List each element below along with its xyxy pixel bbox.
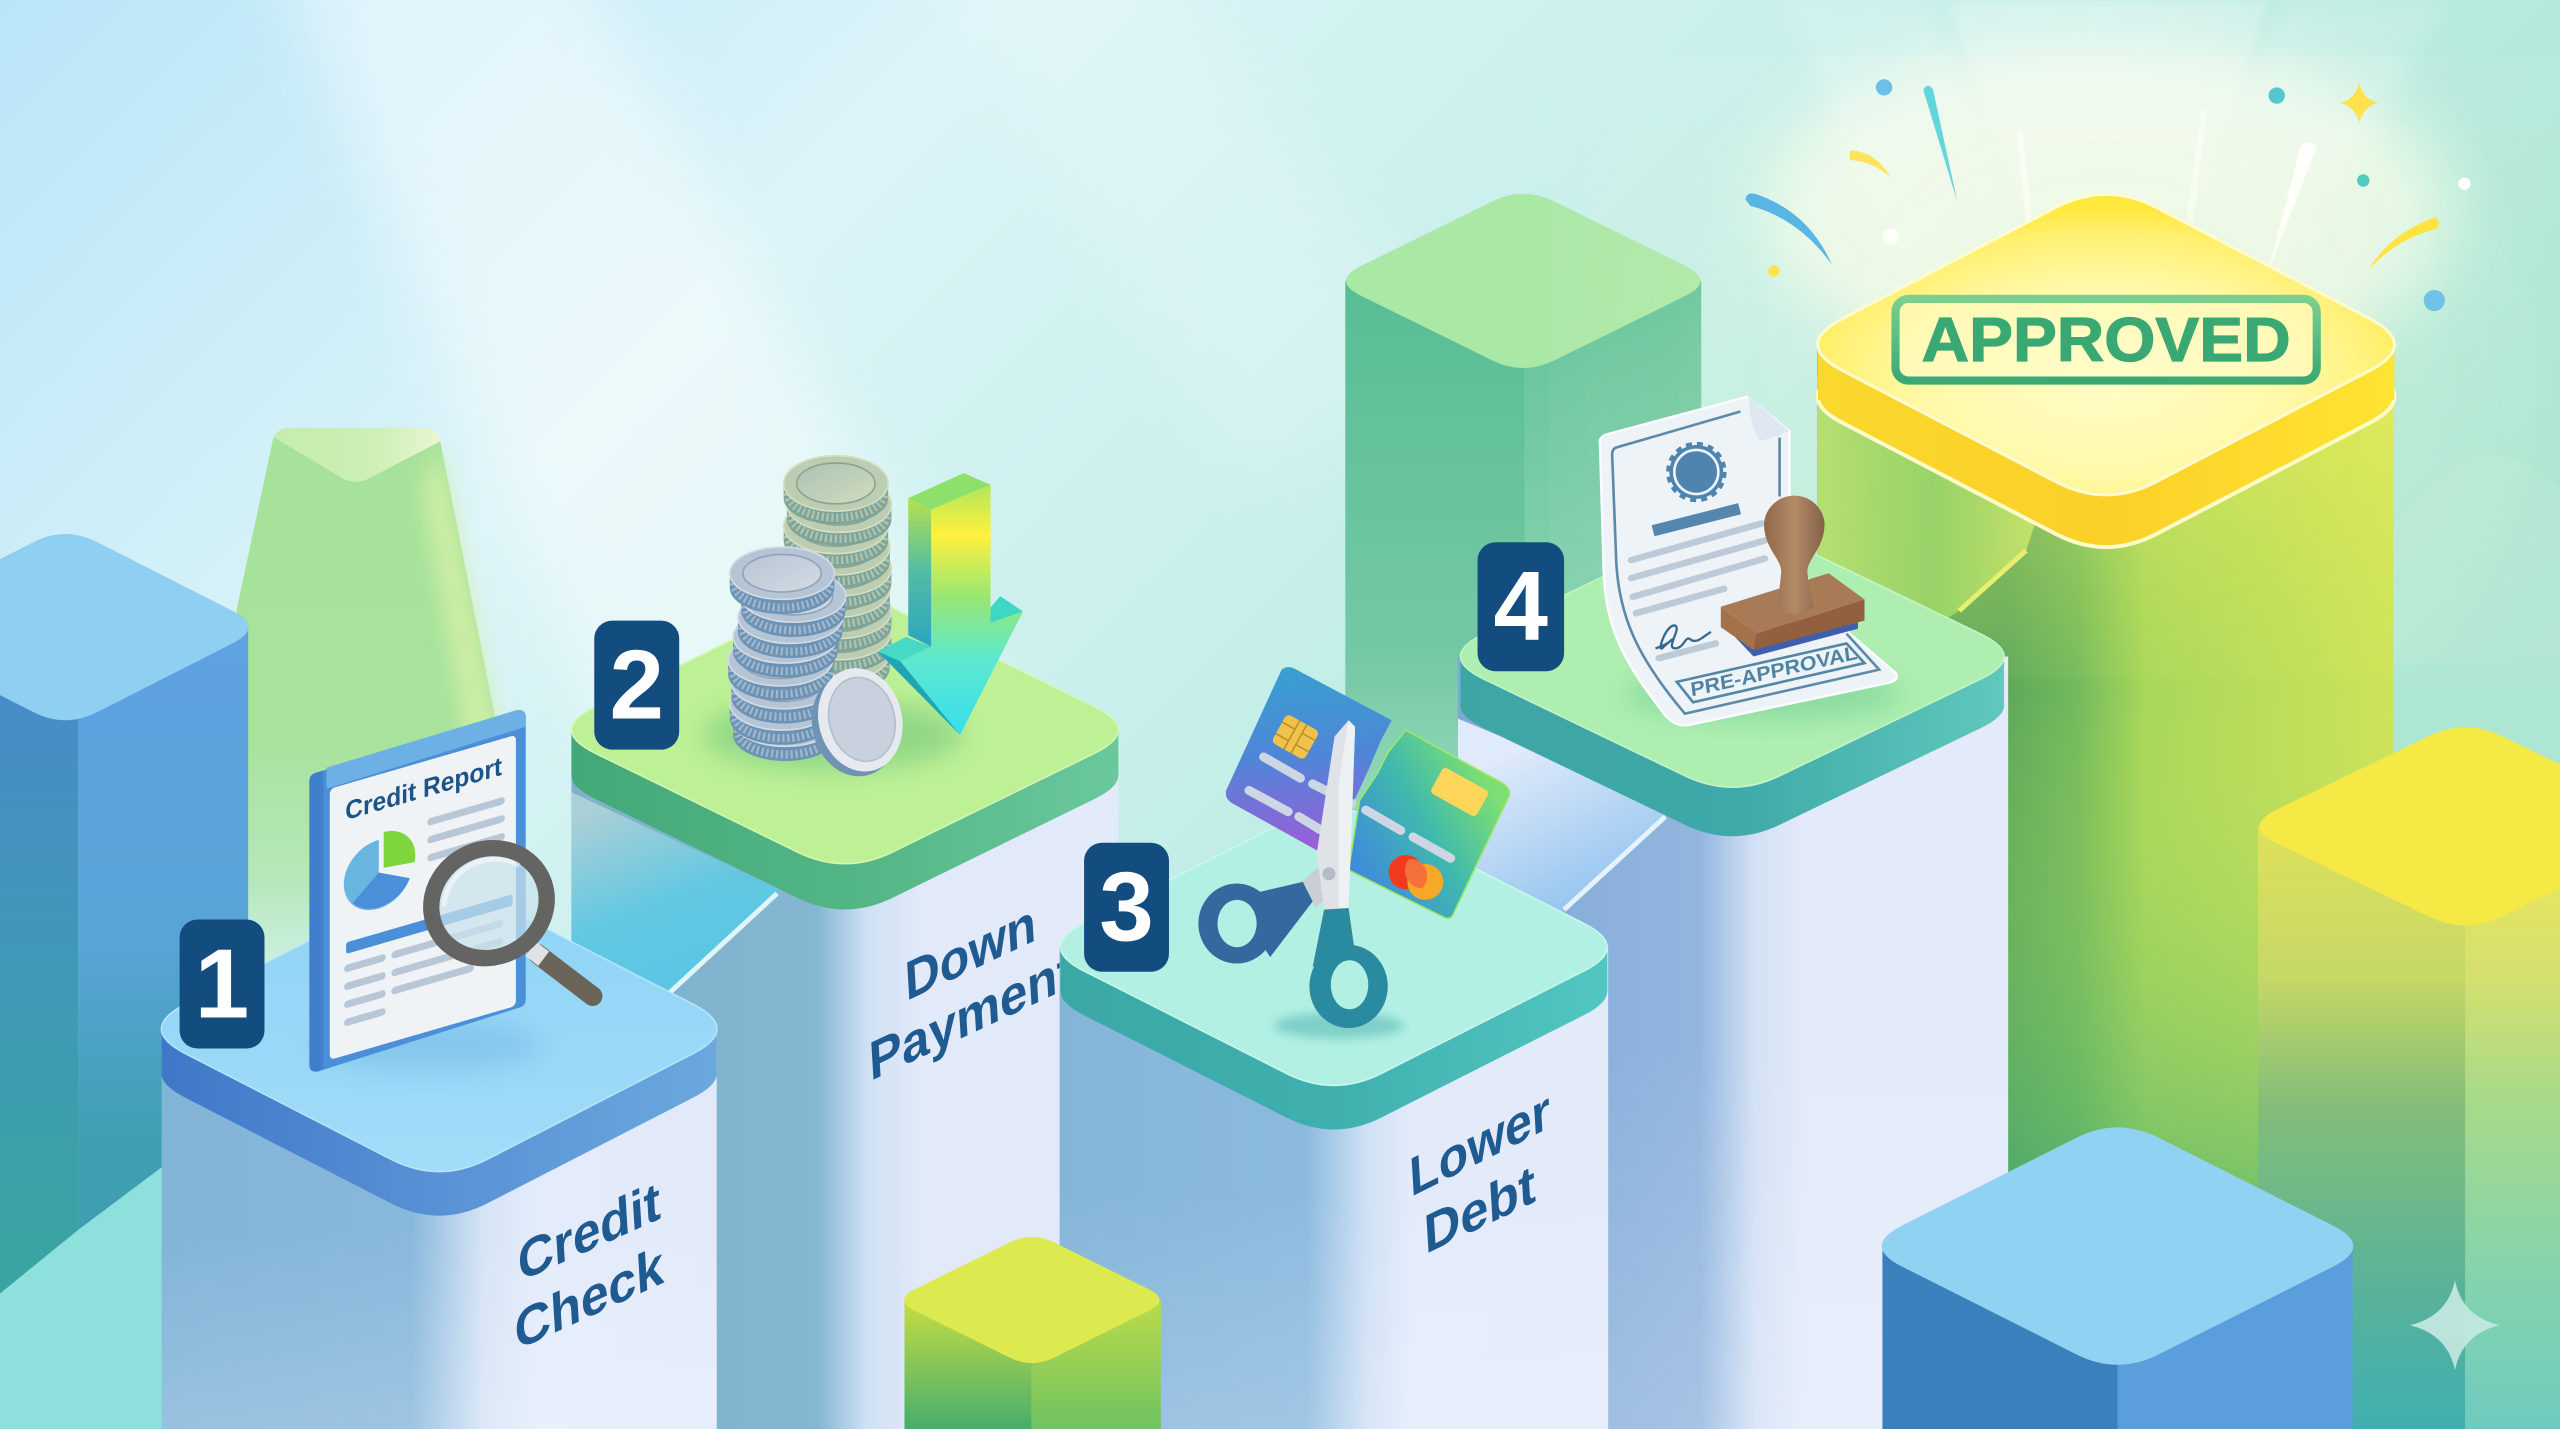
scissors (1198, 720, 1388, 1028)
rubber stamp (1721, 496, 1864, 657)
pillar 1 top (161, 886, 717, 1172)
pillar 2 rim (571, 642, 1118, 909)
pillar 3 top (1061, 809, 1607, 1085)
approved stamp: APPROVED (1922, 306, 2291, 375)
icon: cut credit card and scissors (1198, 667, 1510, 1039)
approved platform rim (1818, 247, 2395, 547)
pillar 4: pre-approval (1458, 526, 2008, 1429)
signature (1656, 625, 1711, 649)
report frame (309, 710, 526, 1072)
down arrow (878, 473, 1023, 735)
approved under-rim glow (1818, 248, 2395, 555)
bottom blue block (1882, 1127, 2353, 1429)
pillar 3: lower debt (1060, 809, 1608, 1429)
bottom green block (904, 1237, 1161, 1429)
badge 3 (1084, 843, 1169, 972)
pillar 1 label: Credit (516, 1169, 662, 1293)
back ghost green block (237, 428, 509, 996)
approved stamp (1896, 299, 2317, 381)
pillar 3 label (1408, 1079, 1552, 1267)
badge 4: 4 (1494, 551, 1548, 661)
seal (1669, 445, 1723, 499)
badge 3: 3 (1099, 852, 1154, 962)
pie chart (344, 823, 415, 919)
card left half (1226, 667, 1392, 850)
background hill (2393, 454, 2560, 817)
badge 2: 2 (609, 630, 664, 740)
pillar 1 rim (161, 930, 717, 1216)
icon: pre-approval document and stamp (1600, 397, 1902, 725)
icon: credit report and magnifier (309, 710, 593, 1072)
pillar 1 label: Check (513, 1235, 666, 1363)
pillar 3 label: Lower (1408, 1079, 1552, 1209)
document (1600, 397, 1897, 725)
back green block (1345, 194, 1701, 967)
pillar 3 label: Debt (1422, 1153, 1537, 1267)
pillar 3 rim (1060, 853, 1607, 1130)
pillar: approved (1817, 194, 2395, 1429)
approved glow and rays (1763, 0, 2449, 528)
badge 1: 1 (195, 928, 249, 1038)
right yellow block (2258, 727, 2560, 1429)
pillar 4 rim (1460, 575, 2004, 836)
pillar 1 label (513, 1169, 666, 1363)
leaning coin (800, 659, 914, 786)
bottom-right sparkle (2410, 1280, 2500, 1370)
front coin stack (728, 547, 846, 761)
back blue block (0, 534, 249, 1293)
pillar 2: down payment (571, 596, 1118, 1429)
pillar 2 top (572, 596, 1118, 864)
pre-approval text box: PRE-APPROVAL (1689, 642, 1859, 701)
blue handle (1198, 882, 1313, 964)
pillar 4 top (1460, 526, 2004, 787)
badge 4 (1478, 542, 1564, 671)
magnifier (412, 828, 593, 996)
pillar 2 label: Payment (867, 938, 1075, 1093)
report title: Credit Report (345, 751, 502, 826)
background light rays (269, 0, 1469, 980)
approved platform top (1818, 194, 2395, 495)
badge 1 (180, 919, 264, 1048)
badge 2 (594, 621, 679, 750)
pillar 1: credit check (161, 886, 717, 1429)
back coin stack (784, 456, 891, 694)
confetti (1745, 79, 2471, 311)
pillar 2 label: Down (903, 892, 1037, 1013)
teal handle (1309, 908, 1388, 1028)
icon: coins and down arrow (702, 456, 1023, 786)
card right half (1349, 730, 1510, 918)
report page (330, 735, 516, 1060)
